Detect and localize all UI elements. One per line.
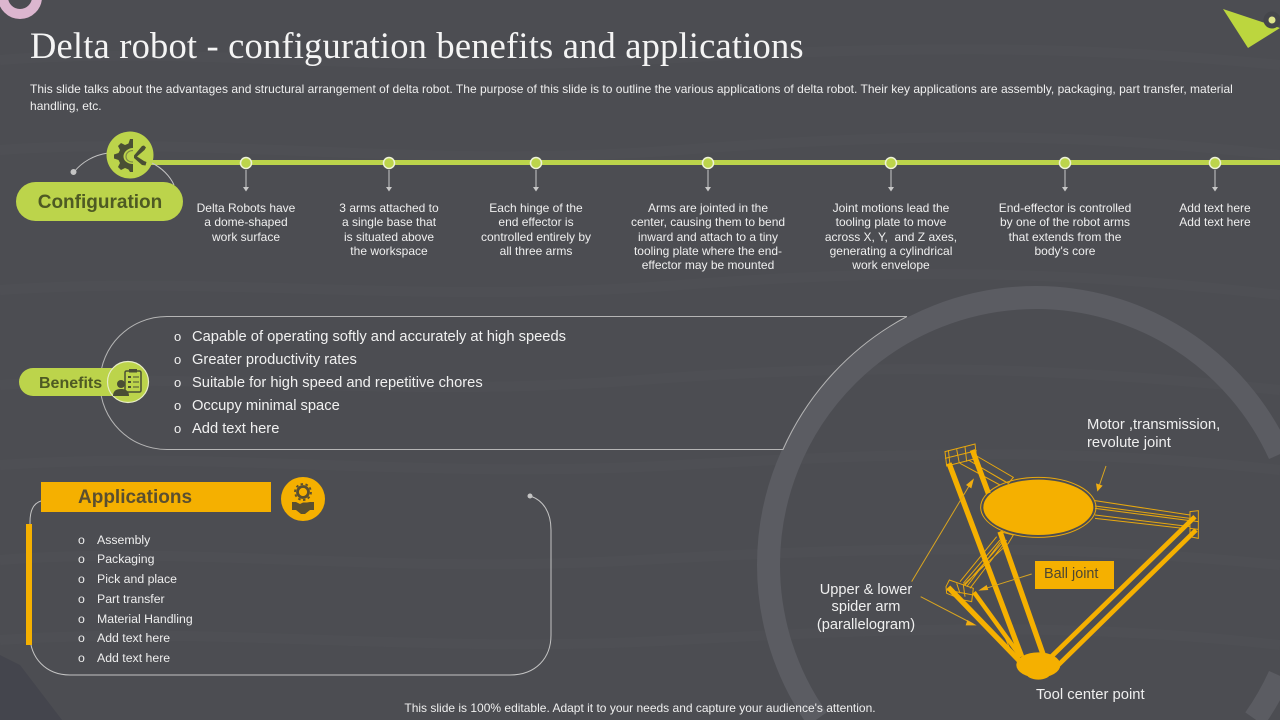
description: joint motions: generating a cylindrical <box>830 244 952 258</box>
applications list <box>78 532 193 664</box>
description: joint motions: Joint motions lead the <box>833 201 949 215</box>
benefits pill: Benefits <box>39 375 102 392</box>
description: 3 arms <box>339 201 439 258</box>
arms <box>948 450 1196 668</box>
description: hinge <box>481 201 591 258</box>
configuration pill: Configuration <box>38 192 162 213</box>
description: hinge: end effector is <box>498 215 574 229</box>
benefits list: Add text here <box>192 420 279 436</box>
applications list: Part transfer <box>97 592 165 606</box>
applications list: Material Handling <box>97 612 193 626</box>
footer note: This slide is 100% editable. Adapt it to your needs and capture your audience's attention. <box>404 701 876 715</box>
applications heading: Applications <box>78 487 192 508</box>
description: end-effector: by one of the robot arms <box>1000 215 1130 229</box>
description: add text: Add text here <box>1179 201 1251 215</box>
applications list: o <box>78 552 85 566</box>
description text: handling, etc. <box>30 98 102 112</box>
applications list: Assembly <box>97 532 150 546</box>
timeline bar <box>150 160 1280 165</box>
label: motor <box>1087 417 1220 451</box>
applications list: o <box>78 650 85 664</box>
description: arms jointed: inward and attach to a tiny <box>638 230 778 244</box>
description: end-effector: body's core <box>1034 244 1095 258</box>
description: Delta Robots <box>197 201 295 244</box>
description: 3 arms: a single base that <box>342 215 436 229</box>
configuration timeline <box>70 152 1280 192</box>
description: add text <box>1179 201 1251 229</box>
timeline nodes and arrows <box>240 158 1220 192</box>
description: joint motions <box>825 201 957 272</box>
upper arm wireframes <box>945 444 1198 658</box>
applications list: Add text here <box>97 630 170 644</box>
configuration pill <box>16 182 183 221</box>
base plate <box>983 480 1093 535</box>
applications panel outline <box>26 494 552 676</box>
description: arms jointed: tooling plate where the end- <box>634 244 782 258</box>
description: Delta Robots: Delta Robots have <box>197 201 295 215</box>
applications list: o <box>78 572 85 586</box>
label: upper and lower spider arm: (parallelogram) <box>817 616 915 632</box>
label: motor: revolute joint <box>1087 435 1171 451</box>
description: Delta Robots: a dome-shaped <box>204 215 288 229</box>
description: end-effector: End-effector is controlled <box>999 201 1131 215</box>
benefits list: o <box>174 398 181 412</box>
benefits list: Capable of operating softly and accurately at high speeds <box>192 328 566 344</box>
description: joint motions: tooling plate to move <box>836 215 946 229</box>
applications list: Add text here <box>97 650 170 664</box>
description: hinge: Each hinge of the <box>489 201 583 215</box>
applications list: Pick and place <box>97 572 177 586</box>
description text: This slide talks about the advantages and structural arrangement of delta robot. The purpose of this slide is to outline the various applications of delta robot. Their key applications are assembly, packaging, part transfer, material <box>30 82 1233 96</box>
connector arcs <box>71 153 174 185</box>
description: hinge: all three arms <box>500 244 572 258</box>
description: 3 arms: the workspace <box>350 244 428 258</box>
description: end-effector: that extends from the <box>1009 230 1121 244</box>
benefits list: o <box>174 352 181 366</box>
benefits list: o <box>174 328 181 344</box>
label: motor: Motor ,transmission, <box>1087 417 1220 433</box>
pointer arrows <box>912 466 1106 624</box>
description: arms jointed: effector may be mounted <box>642 258 774 272</box>
icon: clipboard and person <box>106 360 150 404</box>
title: Delta robot - configuration benefits and applications <box>30 25 804 66</box>
description: Delta Robots: work surface <box>212 230 280 244</box>
description: hinge: controlled entirely by <box>481 230 591 244</box>
icon: gear and handshake <box>281 477 325 521</box>
benefits list: Occupy minimal space <box>192 398 340 414</box>
description: arms jointed <box>631 201 785 272</box>
tool plate <box>1016 652 1060 680</box>
benefits list: Greater productivity rates <box>192 352 357 368</box>
label: upper and lower spider arm <box>817 582 915 632</box>
label: ball joint <box>1035 561 1114 589</box>
applications list: o <box>78 630 85 644</box>
label: ball joint: Ball joint <box>1044 566 1098 582</box>
icon: gear and tools <box>106 132 154 178</box>
benefits list <box>174 328 566 436</box>
description: arms jointed: center, causing them to bend <box>631 215 785 229</box>
description: 3 arms: 3 arms attached to <box>339 201 439 215</box>
applications list: o <box>78 532 85 546</box>
benefits list: Suitable for high speed and repetitive chores <box>192 374 483 390</box>
applications list: Packaging <box>97 552 154 566</box>
description: end-effector <box>999 201 1131 258</box>
decorative green triangle <box>1223 9 1280 48</box>
decorative pink ring <box>0 0 42 19</box>
description: joint motions: work envelope <box>852 258 930 272</box>
applications list: o <box>78 612 85 626</box>
applications heading <box>41 482 271 512</box>
benefits list: o <box>174 420 181 436</box>
label: upper and lower spider arm: Upper & lower <box>820 582 912 598</box>
description: add text: Add text here <box>1179 215 1251 229</box>
applications list: o <box>78 592 85 606</box>
benefits pill <box>19 368 129 396</box>
description: joint motions: across X, Y, and Z axes, <box>825 230 957 244</box>
description: arms jointed: Arms are jointed in the <box>648 201 768 215</box>
description: 3 arms: is situated above <box>344 230 434 244</box>
description text <box>30 82 1233 112</box>
label: upper and lower spider arm: spider arm <box>832 599 900 615</box>
label: tool center point: Tool center point <box>1036 686 1145 702</box>
benefits list: o <box>174 374 181 390</box>
